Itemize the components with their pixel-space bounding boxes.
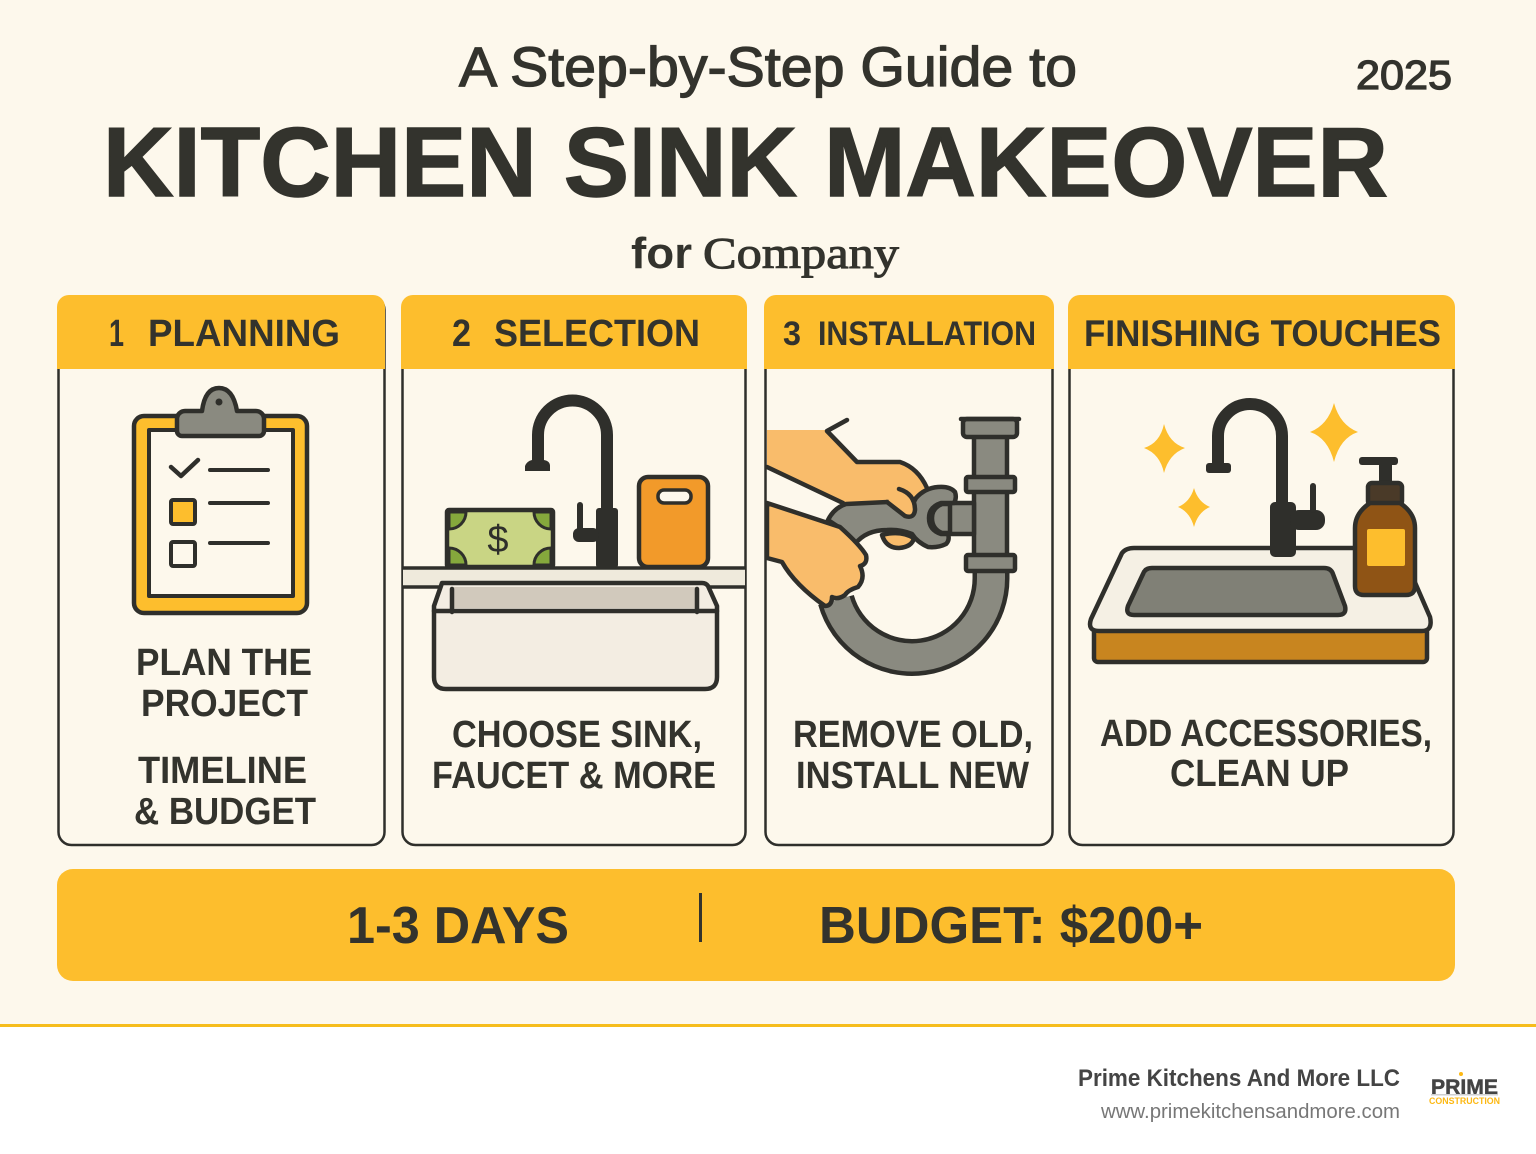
panel: planning <box>57 295 385 845</box>
text: plan the project: PROJECT <box>141 683 308 725</box>
header: planning: 1 <box>109 313 124 355</box>
subtitle: Company <box>703 229 899 278</box>
pipe trap <box>836 419 1019 657</box>
cash <box>447 510 553 567</box>
logo: CONSTRUCTION <box>1429 1096 1500 1106</box>
text: timeline and budget: TIMELINE <box>138 750 307 792</box>
wrench <box>828 487 956 547</box>
icon: finished sink with soap and sparkles <box>1090 403 1431 662</box>
cutting board <box>639 477 708 567</box>
basin <box>1127 568 1345 615</box>
main title: KITCHEN SINK MAKEOVER <box>103 107 1388 217</box>
countertop <box>1090 548 1431 662</box>
text: remove old install new <box>793 714 1033 797</box>
header: finishing touches <box>1068 295 1455 369</box>
text: remove old install new: REMOVE OLD, <box>793 714 1033 756</box>
lower hand <box>767 503 866 606</box>
header: planning <box>57 295 385 369</box>
text: choose sink: CHOOSE SINK, <box>452 714 702 756</box>
panel: installation <box>764 295 1054 845</box>
text: choose sink: FAUCET & MORE <box>432 755 716 797</box>
year: 2025 <box>1356 52 1452 98</box>
header: selection: 2 <box>452 313 471 355</box>
sparkles <box>1144 403 1358 527</box>
text: plan the project <box>136 642 312 725</box>
text: add accessories: ADD ACCESSORIES, <box>1100 713 1432 755</box>
header: finishing touches: FINISHING TOUCHES <box>1084 313 1441 354</box>
lower finger <box>882 533 914 548</box>
soap bottle <box>1355 457 1415 595</box>
website: www.primekitchensandmore.com <box>1100 1101 1400 1123</box>
icon: hands with wrench on pipe <box>767 419 1019 657</box>
header: selection: SELECTION <box>494 313 700 355</box>
subtitle <box>631 229 899 278</box>
subtitle: for <box>631 229 692 278</box>
header: installation: 3 <box>783 315 801 353</box>
panel: selection <box>401 295 747 845</box>
text: timeline and budget: & BUDGET <box>134 791 316 833</box>
upper finger <box>887 488 915 517</box>
logo: PRIME <box>1431 1076 1498 1099</box>
faucet <box>525 400 618 568</box>
header: installation <box>764 295 1054 369</box>
summary bar <box>57 869 1455 981</box>
footer <box>0 1024 1536 1154</box>
header: installation: INSTALLATION <box>818 315 1036 353</box>
company name: Prime Kitchens And More LLC <box>1078 1065 1400 1092</box>
header: planning: PLANNING <box>148 313 340 355</box>
text: remove old install new: INSTALL NEW <box>796 755 1029 797</box>
text: add accessories <box>1100 713 1432 795</box>
faucet <box>1206 404 1325 557</box>
basin <box>434 583 717 689</box>
header: selection <box>401 295 747 369</box>
duration: 1-3 DAYS <box>347 897 569 955</box>
text: choose sink <box>432 714 716 797</box>
counter <box>403 568 745 587</box>
title: step-by-step line: A Step-by-Step Guide to <box>459 35 1077 98</box>
text: add accessories: CLEAN UP <box>1170 753 1349 795</box>
text: timeline and budget <box>134 750 316 833</box>
budget: BUDGET: $200+ <box>819 897 1203 955</box>
logo <box>1429 1072 1500 1106</box>
cash: $ <box>487 519 509 561</box>
upper hand <box>767 420 929 520</box>
icon: sink with faucet, cash and cutting board <box>403 400 745 689</box>
text: plan the project: PLAN THE <box>136 642 312 684</box>
panel: finishing touches <box>1068 295 1455 845</box>
header titles <box>103 35 1452 278</box>
icon: clipboard checklist <box>134 388 307 613</box>
